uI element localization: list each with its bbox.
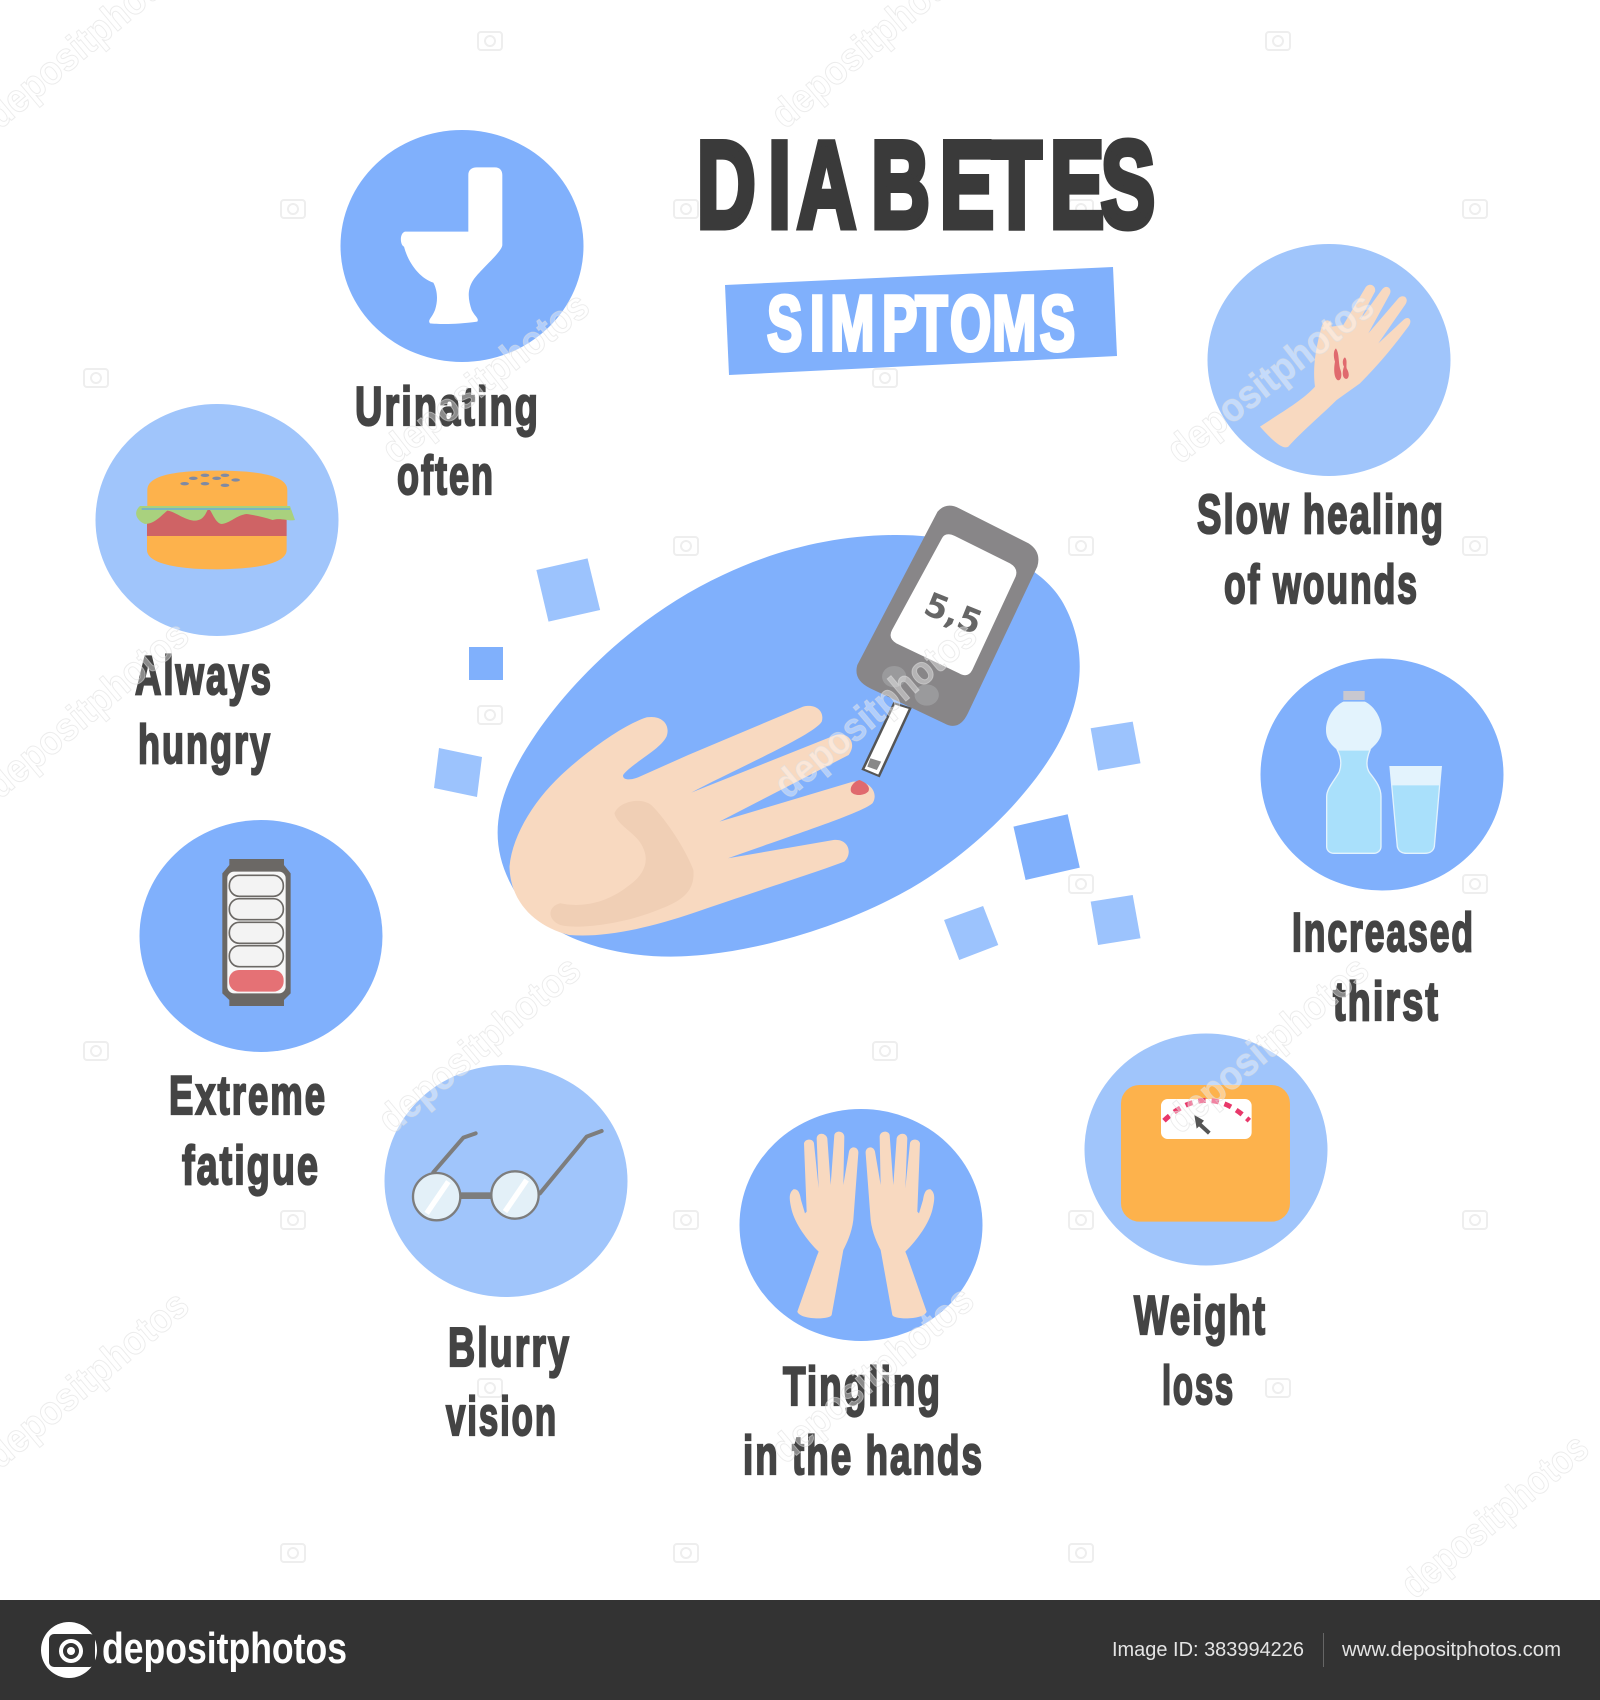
label — [1134, 1284, 1267, 1416]
subtitle banner: SIMPTOMS — [767, 281, 1075, 368]
footer bar — [0, 1600, 1600, 1700]
central illustration: glucose meter and hand: 5,5 — [919, 584, 988, 642]
central illustration: glucose meter and hand — [434, 506, 1141, 960]
icon circle — [1260, 658, 1504, 890]
label: Tingling — [783, 1355, 942, 1417]
label: in the hands — [743, 1424, 984, 1486]
icon circle — [384, 1065, 628, 1297]
panel: blurry vision — [384, 1065, 628, 1447]
label: loss — [1162, 1354, 1235, 1416]
icon circle — [740, 1109, 982, 1341]
label: of wounds — [1224, 553, 1419, 615]
label — [743, 1355, 984, 1486]
label: Increased — [1292, 901, 1475, 963]
label: thirst — [1333, 970, 1440, 1032]
title: DIABETES — [697, 117, 1155, 254]
icon circle — [96, 404, 338, 636]
label: vision — [446, 1385, 558, 1447]
label — [169, 1064, 327, 1196]
watermark: depositphotos — [1158, 284, 1383, 472]
logo text: depositphotos — [102, 1624, 347, 1673]
panel: extreme fatigue — [140, 820, 382, 1196]
icon: camera logo — [41, 1622, 97, 1678]
label: Always — [135, 644, 273, 706]
label: hungry — [138, 713, 272, 775]
label — [1292, 901, 1475, 1032]
watermark: depositphotos — [373, 284, 598, 472]
label — [135, 644, 273, 775]
panel: tingling in the hands — [740, 1109, 984, 1486]
watermark: depositphotos — [370, 947, 589, 1142]
label: fatigue — [182, 1134, 320, 1196]
panel: weight loss — [1084, 1034, 1328, 1416]
icon: two hands — [790, 1132, 934, 1318]
label — [446, 1316, 571, 1447]
website url: www.depositphotos.com — [1341, 1639, 1561, 1661]
subtitle banner — [725, 267, 1117, 375]
panel: always hungry — [96, 404, 338, 775]
icon: battery — [222, 859, 291, 1006]
icon circle — [340, 130, 584, 362]
watermark: depositphotos — [1158, 947, 1377, 1142]
watermark: depositphotos — [766, 612, 985, 807]
label: Extreme — [169, 1064, 327, 1126]
label — [1197, 483, 1445, 615]
icon: glasses — [413, 1131, 602, 1220]
panel: slow healing of wounds — [1197, 244, 1450, 615]
label: often — [397, 444, 495, 506]
icon: bathroom scale — [1121, 1085, 1290, 1222]
icon: burger — [136, 471, 295, 569]
icon: toilet — [401, 167, 502, 324]
label: Weight — [1134, 1284, 1267, 1346]
icon circle — [140, 820, 382, 1052]
label: Slow healing — [1197, 483, 1445, 545]
label: Urinating — [355, 375, 540, 437]
label: Blurry — [448, 1316, 571, 1378]
image id: Image ID: 383994226 — [1112, 1639, 1304, 1661]
icon circle — [1208, 244, 1450, 476]
label — [355, 375, 540, 506]
panel: increased thirst — [1260, 658, 1504, 1032]
icon: wounded hand — [1260, 285, 1410, 447]
icon: bottle and glass — [1326, 691, 1442, 854]
watermark: depositphotos — [763, 1277, 982, 1472]
panel: urinating often — [340, 130, 584, 506]
icon circle — [1084, 1034, 1328, 1266]
